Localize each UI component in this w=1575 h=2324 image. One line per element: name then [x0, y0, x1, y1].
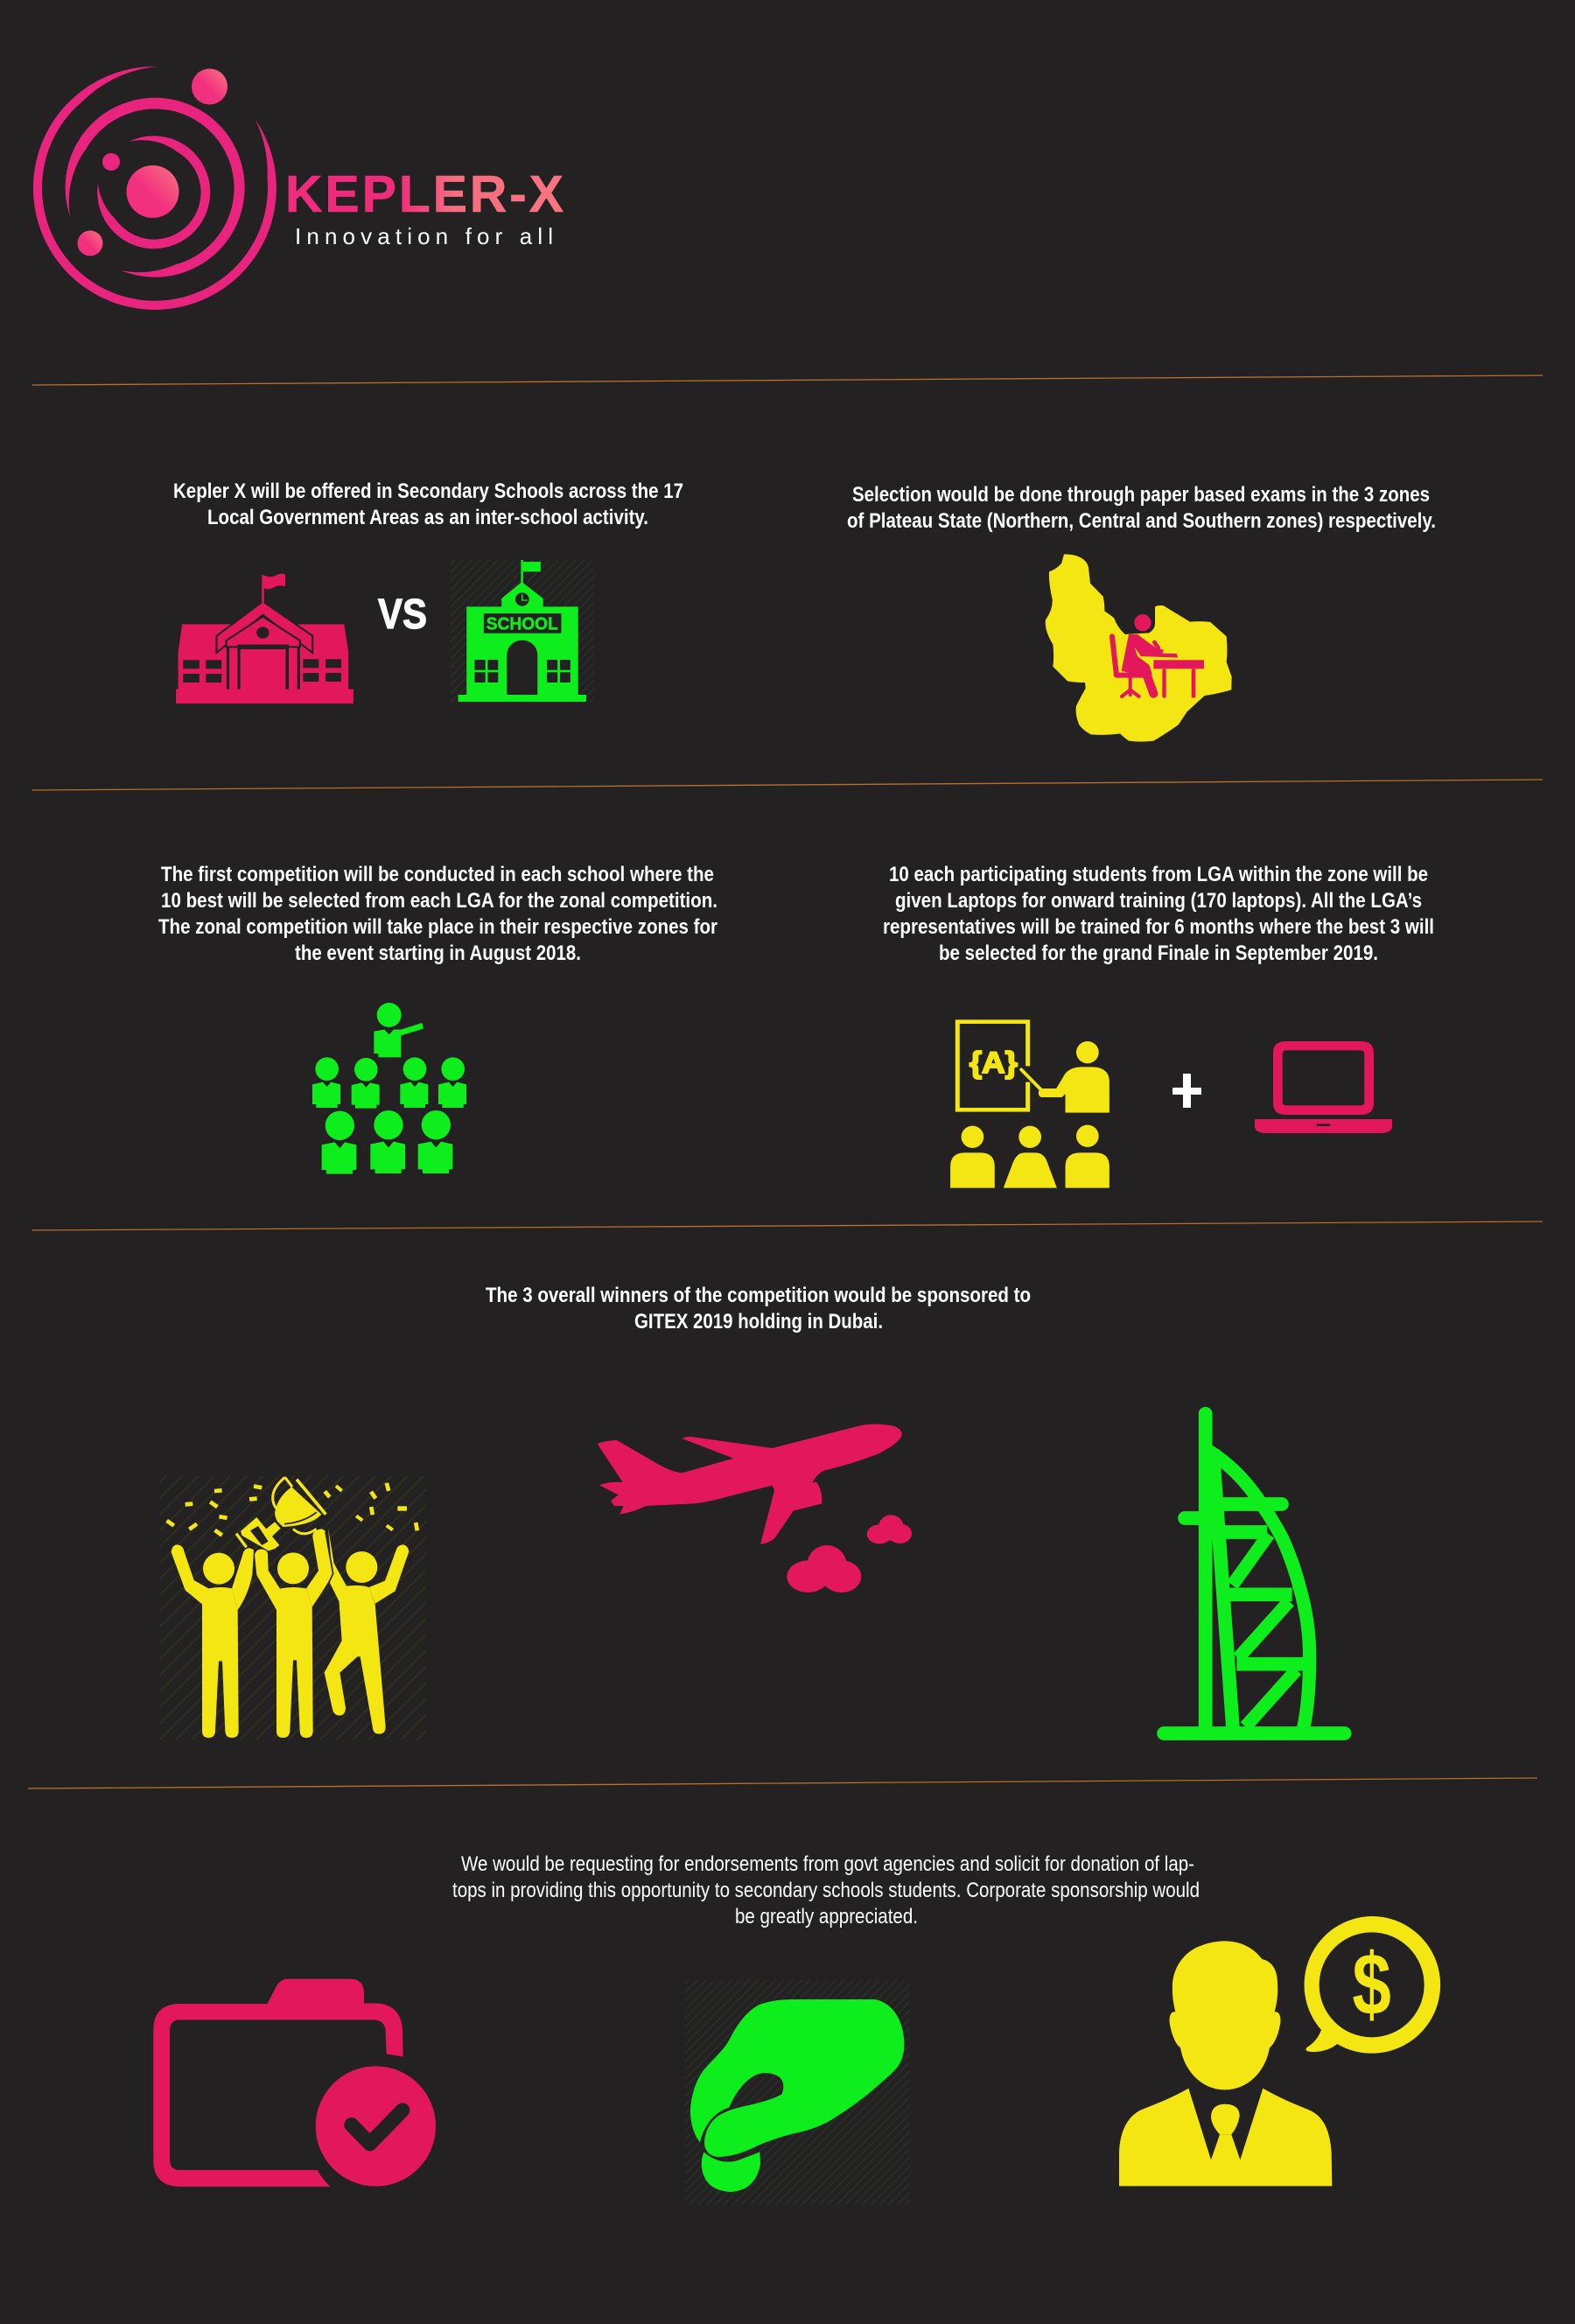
text block: selection: Selection would be done through paper based exams in the 3 zones: [852, 483, 1430, 507]
text block: laptops: given Laptops for onward training (170 laptops). All the LGA’s: [895, 889, 1422, 913]
text block: laptops: be selected for the grand Finale in September 2019.: [939, 942, 1378, 965]
brand name: KEPLER-X: [285, 165, 564, 223]
label: VS: VS: [378, 592, 427, 638]
panel: endorsements and donations: [153, 1852, 1440, 2205]
text block: secondary schools: [173, 480, 683, 529]
text block: first competition: the event starting in August 2018.: [295, 942, 581, 965]
icon: airplane with clouds: [598, 1424, 912, 1592]
logo: Kepler-X: [33, 66, 564, 310]
text block: first competition: The zonal competition will take place in their respective zones for: [158, 915, 718, 939]
text block: secondary schools: Kepler X will be offered in Secondary Schools across the 17: [173, 480, 683, 503]
text block: laptops: 10 each participating students from LGA within the zone will be: [889, 863, 1428, 886]
icon: presenter with audience: [312, 1003, 466, 1174]
text block: GITEX: [486, 1284, 1031, 1334]
icon: plus sign: [1172, 1074, 1201, 1108]
text block: endorsements: [452, 1852, 1200, 1928]
text block: first competition: [158, 863, 718, 965]
text block: endorsements: tops in providing this opportunity to secondary schools students. Corporate sponsorship would: [452, 1879, 1200, 1902]
icon: Plateau State map with exam candidate: [1046, 554, 1232, 742]
panel: selection exams: [847, 483, 1436, 742]
text block: endorsements: be greatly appreciated.: [735, 1905, 918, 1928]
icon: classroom teacher with board: [950, 1019, 1110, 1188]
text block: laptops: [883, 863, 1434, 965]
text block: GITEX: GITEX 2019 holding in Dubai.: [634, 1310, 883, 1334]
tagline: Innovation for all: [295, 223, 553, 249]
icon: laptop: [1255, 1041, 1392, 1133]
icon: Burj Al Arab: [1164, 1414, 1345, 1733]
text block: secondary schools: Local Government Areas as an inter-school activity.: [207, 506, 648, 529]
text block: first competition: The first competition will be conducted in each school where the: [161, 863, 714, 886]
icon: hand holding coin: [690, 1999, 904, 2192]
logo icon: orbits: [33, 66, 276, 310]
panel: inter-school activity: [173, 480, 683, 704]
panel: school and zonal competition: [158, 863, 718, 1174]
icon: classroom teacher with board: {A}: [970, 1045, 1018, 1080]
panel: GITEX sponsorship: [160, 1284, 1345, 1740]
text block: first competition: 10 best will be selected from each LGA for the zonal competition.: [161, 889, 718, 913]
hatched backdrop: green school: [451, 560, 594, 702]
text block: selection: [847, 483, 1436, 533]
icon: crimson school: [176, 574, 354, 704]
icon: green school: [458, 560, 586, 702]
text block: laptops: representatives will be trained for 6 months where the best 3 will: [883, 915, 1434, 939]
icon: folder with check mark: [153, 1979, 436, 2187]
text block: selection: of Plateau State (Northern, Central and Southern zones) respectively.: [847, 509, 1436, 533]
hatched backdrop: hand: [685, 1980, 910, 2205]
text block: endorsements: We would be requesting for endorsements from govt agencies and solicit for donation of lap-: [461, 1852, 1194, 1876]
text block: GITEX: The 3 overall winners of the competition would be sponsored to: [486, 1284, 1031, 1307]
icon: businessman with money speech bubble: $: [1352, 1936, 1391, 2034]
icon: green school: SCHOOL: [486, 613, 558, 634]
icon: businessman with money speech bubble: [1119, 1916, 1440, 2186]
icon: three winners with trophy: [165, 1477, 419, 1738]
panel: laptops and training: [883, 863, 1434, 1188]
hatched backdrop: winners: [160, 1476, 426, 1740]
